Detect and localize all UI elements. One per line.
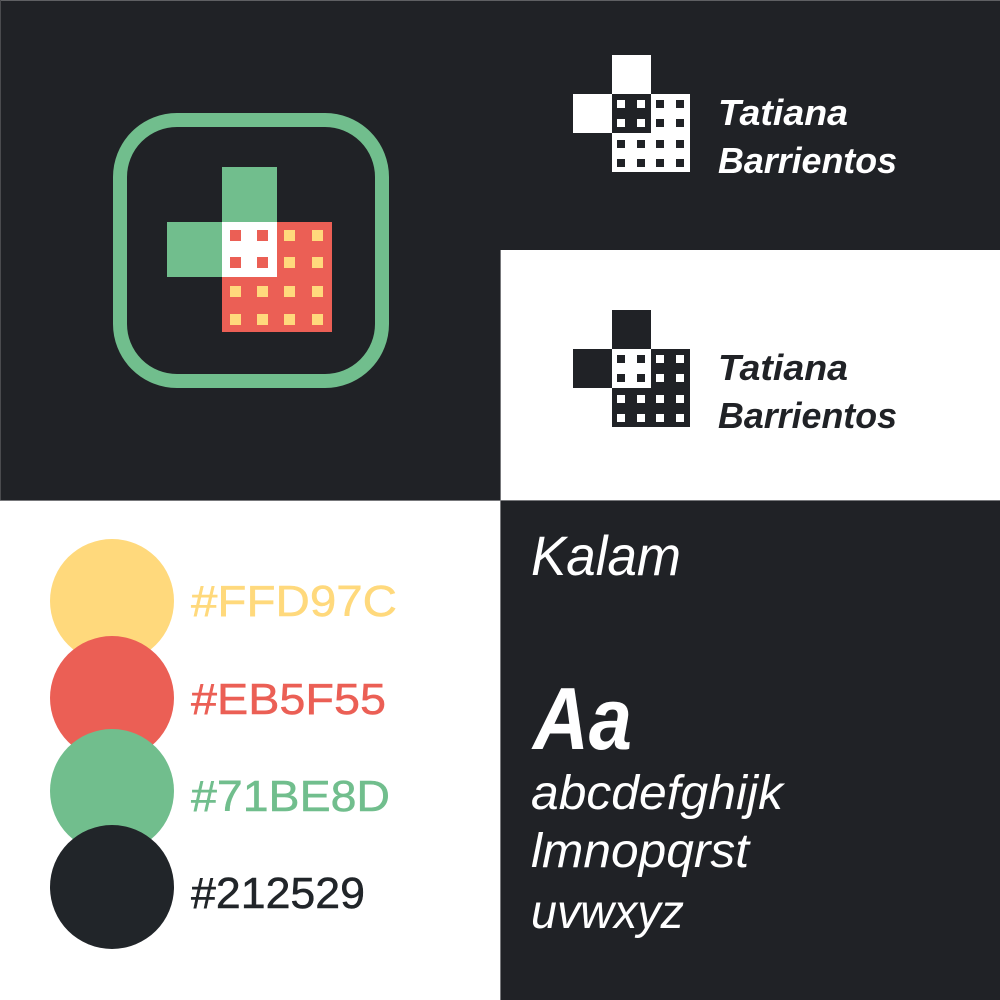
swatch: red [50, 636, 386, 760]
swatch: yellow: #FFD97C [191, 577, 397, 626]
typography specimen [531, 524, 786, 939]
alphabet line 2: lmnopqrst [531, 825, 751, 878]
logo: white on dark [573, 55, 897, 181]
wordmark: Barrientos [718, 395, 897, 436]
wordmark: Tatiana [718, 92, 848, 133]
white overlap [222, 222, 277, 277]
panel: colour palette background [0, 500, 501, 1000]
swatch: dark: #212529 [191, 869, 365, 918]
panel: light logo background [501, 250, 1000, 500]
logo mark [573, 310, 690, 427]
alphabet line 1: abcdefghijk [531, 767, 786, 820]
wordmark: Tatiana [718, 347, 848, 388]
swatch: green: #71BE8D [191, 772, 390, 821]
red dots [230, 230, 268, 268]
swatch: red: #EB5F55 [191, 675, 386, 724]
icon: colour app logo [120, 120, 382, 381]
panel: app icon background [0, 0, 501, 500]
green cross [167, 167, 277, 277]
swatch: yellow [50, 539, 397, 663]
yellow dots [230, 230, 323, 325]
logo: dark on white [573, 310, 897, 436]
colour palette [50, 539, 397, 949]
alphabet line 3: uvwxyz [531, 886, 684, 939]
panel: typography background [501, 500, 1000, 1000]
swatch: green [50, 729, 390, 853]
font name: Kalam [531, 524, 681, 587]
logo mark [573, 55, 690, 172]
wordmark: Barrientos [718, 140, 897, 181]
large sample: Aa [531, 669, 632, 768]
rounded ring [120, 120, 382, 381]
red square [222, 222, 332, 332]
panel: dark logo background [501, 0, 1000, 250]
swatch: dark [50, 825, 365, 949]
